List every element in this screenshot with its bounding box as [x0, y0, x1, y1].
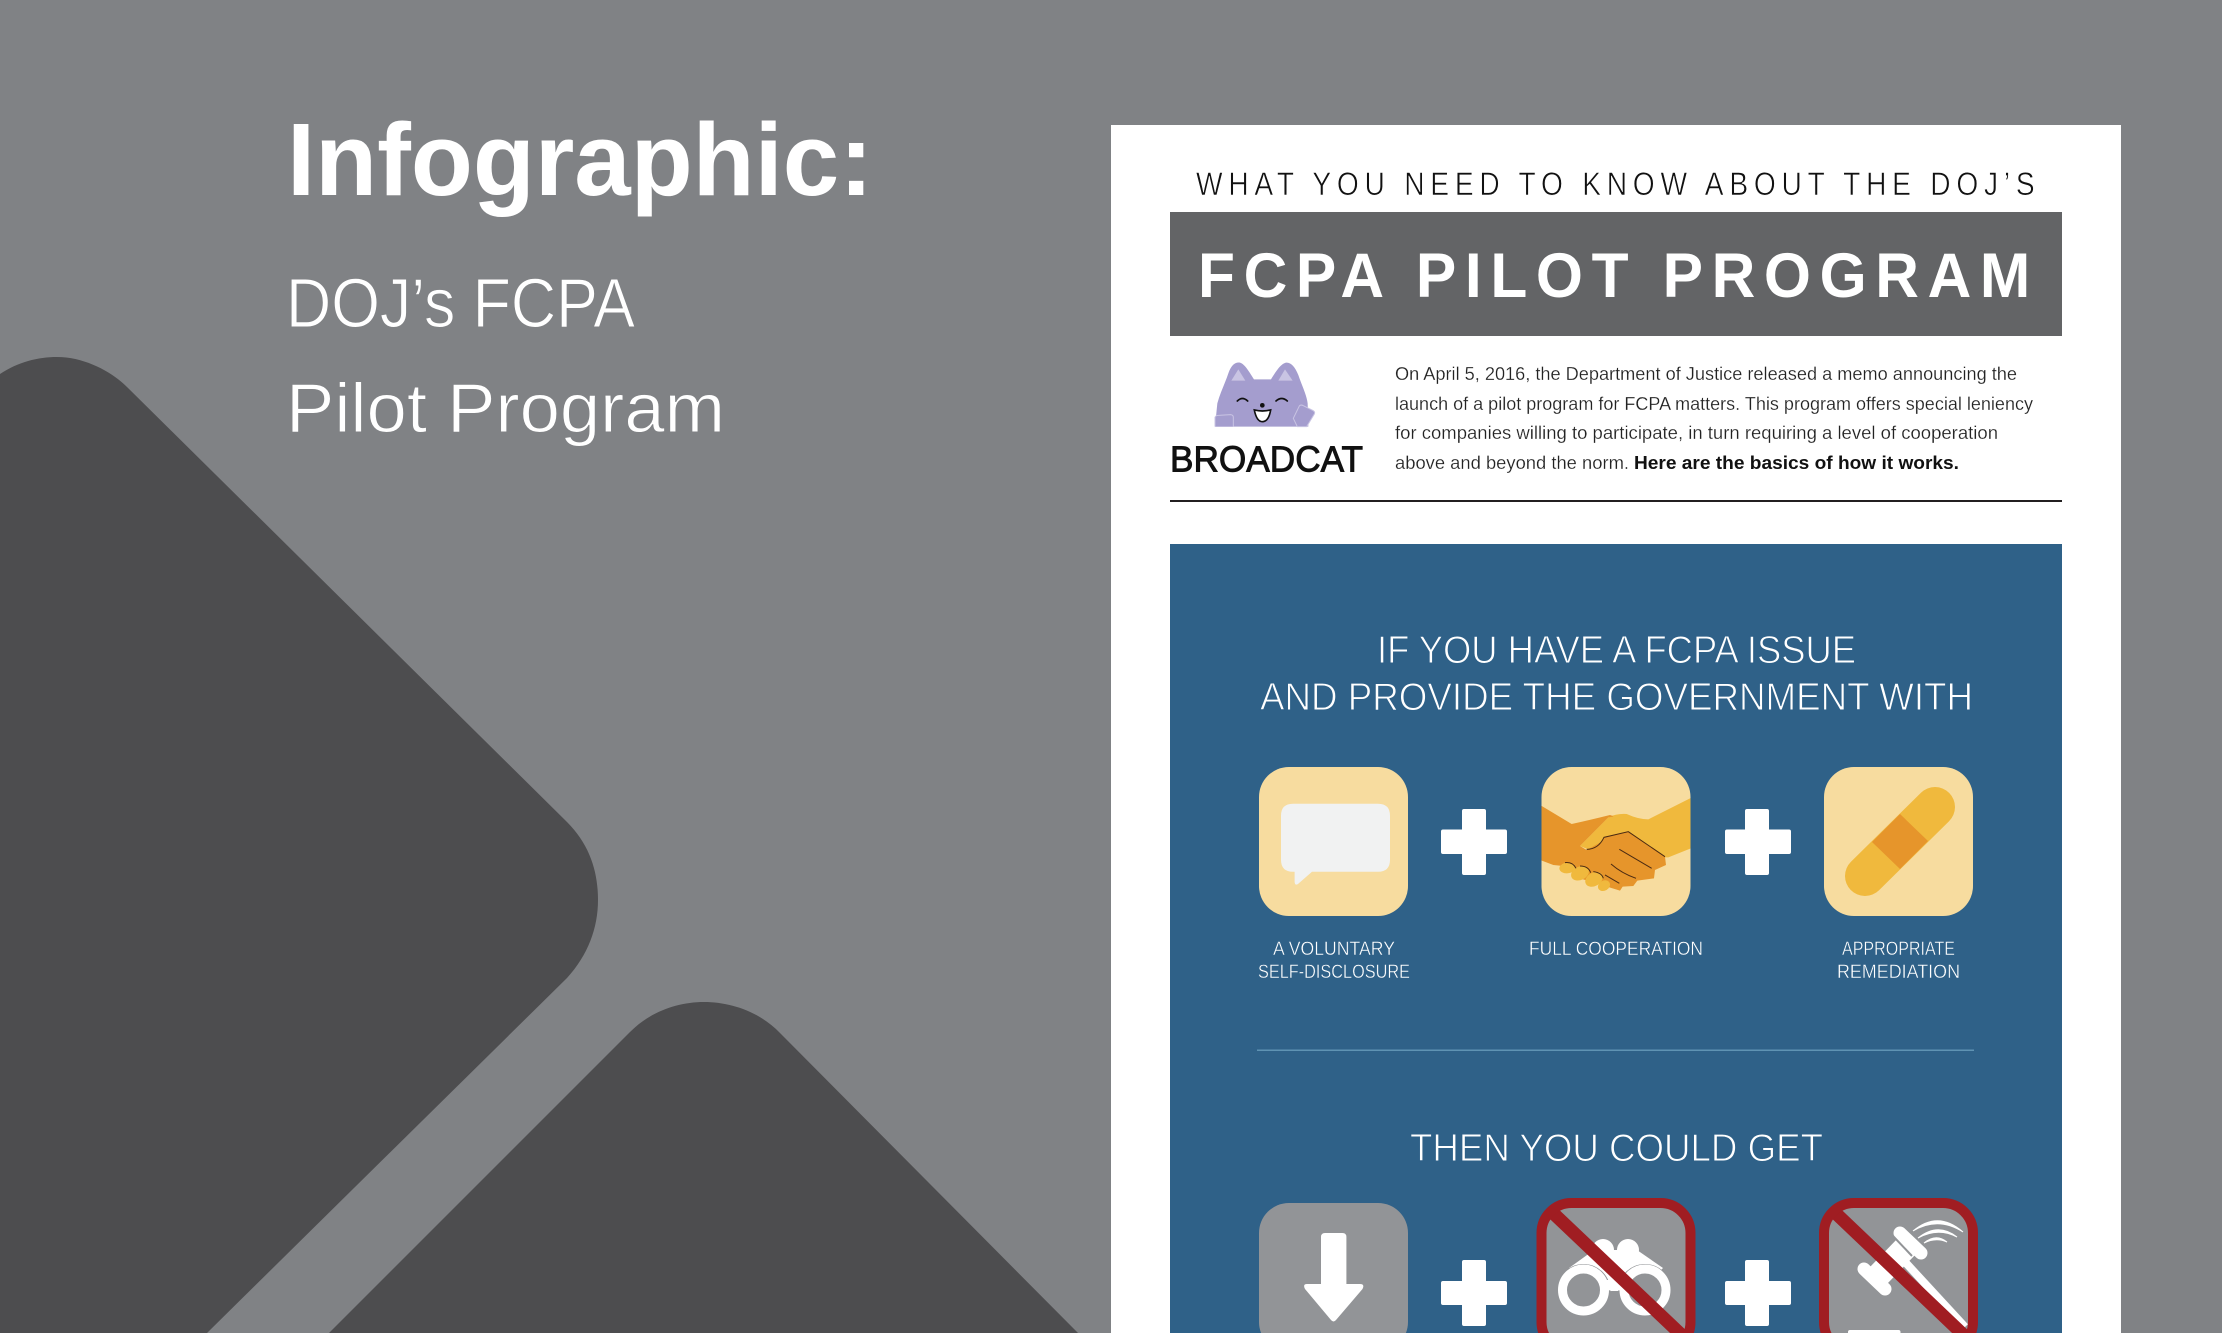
page title: Infographic: [287, 102, 873, 217]
intro text: for companies willing to participate, in turn requiring a level of cooperation [1395, 423, 1998, 443]
kicker heading: WHAT YOU NEED TO KNOW ABOUT THE DOJ’S [1196, 167, 2035, 202]
intro text [1395, 364, 2033, 473]
labels: conditions [1258, 938, 1960, 983]
icon: crossed-out binoculars [1542, 1203, 1690, 1333]
icon: plus [1725, 809, 1791, 875]
section heading: benefits: THEN YOU COULD GET [1410, 1127, 1823, 1170]
intro text: launch of a pilot program for FCPA matters. This program offers special leniency [1395, 394, 2033, 414]
panel: infographic card [1111, 125, 2121, 1333]
labels: conditions: APPROPRIATE [1842, 938, 1955, 960]
labels: conditions: SELF-DISCLOSURE [1258, 961, 1410, 983]
title banner [1170, 212, 2062, 336]
icon: down arrow [1259, 1203, 1408, 1333]
panel: blue program panel [1170, 544, 2062, 1333]
labels: conditions: REMEDIATION [1837, 961, 1960, 983]
page subtitle: Pilot Program [286, 369, 725, 447]
logo: Broadcat [1170, 363, 1363, 480]
icon: bandage [1824, 767, 1973, 916]
labels: conditions: FULL COOPERATION [1529, 938, 1703, 960]
icon: handshake [1538, 767, 1693, 916]
wordmark: BROADCAT [1170, 438, 1363, 480]
labels: conditions: A VOLUNTARY [1273, 938, 1395, 960]
icon: crossed-out gavel [1824, 1203, 1973, 1333]
section heading: conditions: IF YOU HAVE A FCPA ISSUE [1377, 629, 1856, 672]
page subtitle: DOJ’s FCPA [286, 264, 635, 342]
intro text: Here are the basics of how it works. [1634, 453, 1959, 473]
decorative dark diamond bottom [329, 1002, 1078, 1333]
icon: speech bubble [1259, 767, 1408, 916]
decorative dark diamond left [0, 357, 598, 1333]
page subtitle [286, 264, 725, 447]
title banner: FCPA PILOT PROGRAM [1198, 241, 2030, 311]
icon: plus [1441, 1260, 1507, 1326]
intro text: On April 5, 2016, the Department of Justice released a memo announcing the [1395, 364, 2017, 384]
icon: plus [1441, 809, 1507, 875]
section heading: conditions [1260, 629, 1973, 719]
icon: cat [1215, 363, 1315, 427]
icon: plus [1725, 1260, 1791, 1326]
intro text: above and beyond the norm. [1395, 453, 1629, 473]
section heading: conditions: AND PROVIDE THE GOVERNMENT WITH [1260, 676, 1973, 719]
